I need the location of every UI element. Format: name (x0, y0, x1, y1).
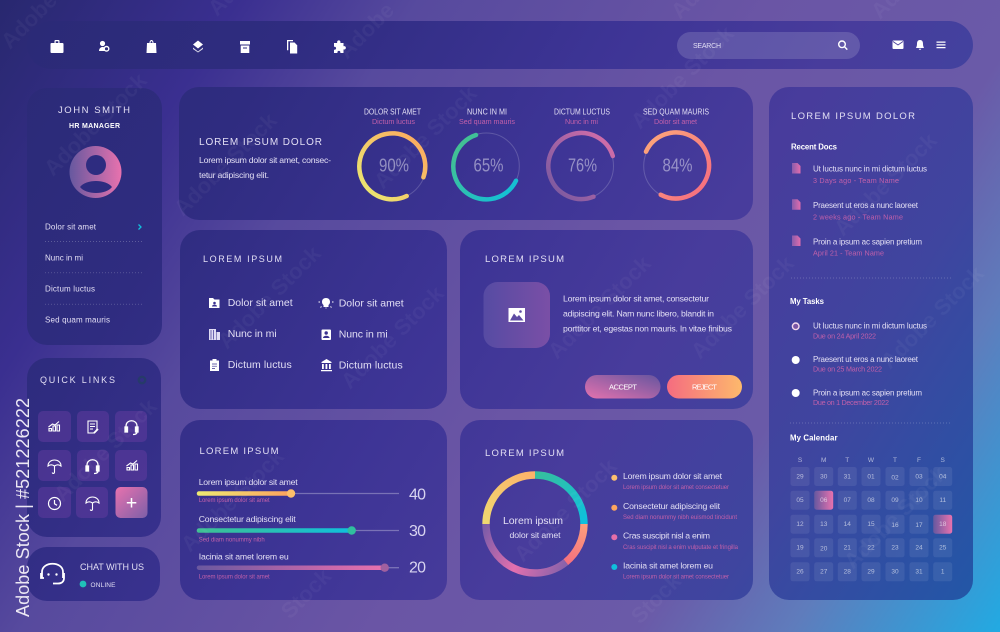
legend (611, 471, 739, 581)
date numbers: 10 (915, 497, 923, 504)
progress ring 84 percent: Dolor sit amet (654, 117, 697, 126)
icon: headset (125, 421, 138, 434)
slider 40 (199, 477, 426, 504)
icon: briefcase (50, 40, 64, 53)
icon: layers (193, 40, 203, 52)
list item: bank: Dictum luctus (339, 360, 403, 372)
profile role: HR MANAGER (69, 123, 120, 130)
progress ring 65 percent: NUNC IN MI (467, 108, 507, 116)
chat heading: CHAT WITH US (80, 562, 144, 572)
donut chart (486, 475, 584, 573)
icon list heading: LOREM IPSUM (203, 254, 282, 264)
task checkbox selected (792, 323, 799, 330)
menu list: Sed quam mauris (45, 316, 110, 325)
date numbers: 21 (844, 544, 851, 552)
reject button: REJECT (692, 382, 717, 392)
slider 40: Lorem ipsum dolor sit amet (199, 477, 298, 487)
panel: quick links (27, 358, 161, 537)
icon: menu (936, 42, 946, 48)
stock watermark pattern: Adobe Stock (829, 127, 942, 241)
legend: Lorem ipsum dolor sit amet consectetuer (623, 575, 729, 581)
search box: SEARCH (693, 43, 721, 50)
stock watermark pattern: Adobe Stock (213, 240, 326, 354)
donut heading: LOREM IPSUM (485, 448, 564, 459)
content paragraph: porttitor et, egestas non mauris. In vitae finibus (563, 324, 733, 334)
menu list: Dolor sit amet (45, 222, 97, 232)
stock watermark pattern: Adobe Stock (49, 393, 162, 507)
progress ring 90 percent: DOLOR SIT AMET (364, 108, 421, 116)
progress ring 90 percent: Dictum luctus (372, 117, 415, 126)
slider 30: Consectetur adipiscing elit (199, 514, 296, 524)
stock watermark pattern: Adobe Stock (336, 280, 449, 394)
list item: lightbulb: Dolor sit amet (339, 297, 404, 309)
date numbers: 23 (891, 544, 899, 552)
weekday labels: S (941, 457, 946, 464)
date numbers: 31 (844, 474, 851, 480)
panel: overview with progress rings (179, 87, 753, 220)
recent docs: April 21 - Team Name (813, 249, 884, 258)
date numbers: 25 (939, 544, 947, 552)
slider 20: Iacinia sit amet lorem eu (199, 552, 289, 562)
calendar: My Calendar (790, 433, 838, 442)
my tasks: Due on 25 March 2022 (813, 365, 882, 374)
stock watermark pattern: Stock (276, 563, 336, 624)
recent docs: Recent Docs (791, 142, 838, 152)
menu list: Dictum luctus (45, 285, 95, 294)
accept button: ACCEPT (609, 382, 637, 392)
date numbers: 31 (915, 568, 923, 576)
avatar (70, 146, 122, 198)
menu list (45, 222, 143, 325)
content paragraph: Lorem ipsum dolor sit amet, consectetur (563, 294, 709, 304)
highlighted date 18 (933, 515, 952, 534)
legend: Sed diam nonummy nibh euismod tincidunt (623, 515, 737, 521)
accept button (585, 375, 660, 398)
slider 40: 40 (409, 486, 426, 504)
stock watermark pattern: Adobe Stock (876, 260, 989, 374)
date numbers: 11 (939, 497, 946, 504)
date numbers: 02 (891, 474, 899, 482)
icon: document with pen (88, 421, 98, 433)
slider 30: 30 (409, 523, 426, 540)
stock watermark pattern: Adobe Stock (839, 460, 952, 574)
weekday labels (798, 457, 946, 464)
panel: donut chart (460, 420, 753, 600)
legend: Iacinia sit amet lorem eu (623, 560, 713, 570)
my tasks: Ut luctus nunc in mi dictum luctus (813, 322, 927, 331)
date numbers: 27 (820, 568, 828, 576)
icon: doc (792, 199, 800, 210)
panel: sliders (180, 420, 447, 600)
progress ring 76 percent: 76% (568, 156, 597, 176)
icon: chevron (138, 224, 141, 230)
my tasks: Proin a ipsum ac sapien pretium (813, 389, 922, 398)
overview description (199, 155, 331, 180)
weekday labels: S (798, 457, 803, 464)
my tasks (790, 297, 927, 407)
panel: chat (27, 547, 160, 601)
icon: magnifier (839, 41, 847, 50)
panel: content card with actions (460, 230, 753, 409)
legend: Consectetur adipiscing elit (623, 501, 721, 511)
date numbers: 01 (867, 474, 875, 480)
icon: archive box (240, 41, 250, 53)
overview heading: LOREM IPSUM DOLOR (199, 137, 322, 148)
date numbers: 15 (867, 521, 875, 528)
vertical stock credit: Adobe Stock | #521226222 (13, 398, 33, 617)
stock watermark pattern: Adobe Stock (686, 250, 799, 364)
task checkbox (792, 356, 800, 364)
icon: user settings (99, 41, 109, 51)
weekday labels: T (845, 457, 849, 464)
panel: icon list (180, 230, 447, 409)
icon: headset (86, 460, 99, 474)
date numbers: 22 (867, 544, 875, 552)
icon: documents (287, 40, 297, 54)
date numbers: 04 (939, 474, 947, 480)
date numbers: 07 (844, 497, 851, 504)
icon: clock (48, 498, 60, 510)
search box (677, 32, 860, 59)
slider 40: Lorem ipsum dolor sit amet (199, 498, 270, 504)
tile grid (38, 411, 147, 518)
panel: top navigation bar (27, 21, 973, 69)
overview description: tetur adipiscing elit. (199, 170, 269, 180)
date numbers: 16 (891, 522, 899, 529)
icon: mail (892, 40, 904, 49)
my tasks: Due on 24 April 2022 (813, 331, 876, 340)
stock watermark pattern: Adobe Stock (176, 443, 289, 557)
icon: chart (126, 460, 138, 470)
add button (116, 487, 148, 518)
task checkbox (792, 389, 800, 397)
my tasks: My Tasks (790, 297, 825, 306)
date numbers: 29 (796, 474, 804, 480)
content card heading: LOREM IPSUM (485, 254, 564, 265)
recent docs: 2 weeks ago - Team Name (813, 212, 903, 221)
donut centre label: Lorem ipsum (503, 515, 563, 527)
icon: doc (792, 163, 800, 174)
stock watermark pattern: Stock (626, 568, 686, 629)
online status: ONLINE (90, 582, 116, 589)
recent docs: Proin a ipsum ac sapien pretium (813, 237, 922, 246)
progress ring 65 percent: 65% (474, 156, 504, 176)
sliders heading: LOREM IPSUM (200, 446, 279, 457)
slider 30: Sed diam nonummy nibh (199, 538, 265, 544)
date numbers: 30 (820, 474, 828, 480)
sidebar heading: LOREM IPSUM DOLOR (791, 111, 915, 122)
list item: contact card: Nunc in mi (339, 328, 388, 340)
icon: doc (792, 236, 800, 246)
progress ring 65 percent: Sed quam mauris (459, 117, 515, 126)
progress ring 84 percent: SED QUAM MAURIS (643, 108, 709, 116)
icon: umbrella (48, 460, 61, 473)
icon: chart (48, 422, 60, 431)
date numbers: 13 (820, 521, 828, 528)
icon: gear (139, 377, 145, 383)
progress ring 76 percent: Nunc in mi (565, 117, 598, 126)
list item: folder: Dolor sit amet (228, 297, 293, 309)
slider 20: Lorem ipsum dolor sit amet (199, 575, 270, 581)
legend: Cras suscipit nisl a enim vulputate et fringilla (623, 545, 739, 551)
slider 20 (199, 552, 426, 581)
recent docs (791, 142, 927, 258)
overview description: Lorem ipsum dolor sit amet, consec- (199, 155, 331, 165)
date numbers: 09 (891, 497, 899, 504)
date numbers (796, 474, 947, 576)
recent docs: Praesent ut eros a nunc laoreet (813, 201, 919, 210)
date numbers: 1 (941, 568, 945, 576)
date numbers: 03 (915, 474, 923, 480)
date numbers: 30 (891, 568, 899, 576)
image placeholder (484, 282, 550, 348)
date numbers: 17 (915, 522, 923, 529)
stock watermark pattern: Adobe Stock (543, 250, 656, 364)
menu list: Nunc in mi (45, 254, 83, 262)
date cells (790, 467, 952, 581)
stock watermark pattern: Adobe Stock (369, 80, 482, 194)
stock watermark pattern: Adobe Stock (39, 67, 152, 181)
panel: profile (27, 88, 162, 345)
progress ring 84 percent: 84% (662, 156, 692, 176)
progress ring 76 percent: DICTUM LUCTUS (554, 108, 610, 116)
stock watermark pattern: Adobe Stock (626, 20, 739, 134)
progress ring 65 percent (453, 108, 519, 199)
weekday labels: M (821, 457, 826, 464)
icon: umbrella (86, 497, 99, 510)
donut centre label: dolor sit amet (510, 530, 561, 540)
date numbers: 24 (915, 544, 923, 552)
my tasks: Due on 1 December 2022 (813, 398, 889, 407)
my tasks: Praesent ut eros a nunc laoreet (813, 355, 919, 364)
date numbers: 19 (796, 544, 804, 552)
list item: building: Nunc in mi (228, 328, 277, 340)
recent docs: 3 Days ago - Team Name (813, 176, 899, 185)
stock watermark pattern: Adobe Stock (169, 107, 282, 221)
profile name: JOHN SMITH (58, 105, 130, 116)
progress ring 90 percent: 90% (379, 156, 409, 176)
date numbers: 06 (820, 497, 828, 504)
progress ring 84 percent (643, 108, 710, 199)
date numbers: 26 (796, 568, 804, 576)
weekday labels: T (893, 457, 897, 464)
reject button (667, 375, 742, 398)
date numbers: 18 (939, 521, 947, 528)
recent docs: Ut luctus nunc in mi dictum luctus (813, 165, 927, 174)
progress ring 76 percent (548, 108, 614, 199)
date numbers: 14 (844, 521, 851, 528)
date numbers: 28 (844, 568, 851, 576)
date numbers: 29 (867, 568, 875, 576)
icon: bell (916, 40, 924, 50)
date numbers: 20 (820, 546, 828, 552)
legend: Lorem ipsum dolor sit amet consectetuer (623, 485, 729, 491)
icon: chat support head (41, 564, 64, 584)
slider 30 (199, 514, 426, 544)
legend: Lorem ipsum dolor sit amet (623, 471, 723, 481)
highlighted date 06 (814, 491, 833, 510)
panel: sidebar (769, 87, 973, 600)
quick links heading: QUICK LINKS (40, 375, 115, 385)
slider 20: 20 (409, 560, 426, 576)
content paragraph: adipiscing elit. Nam nunc libero, blandit in (563, 309, 714, 319)
content paragraph (563, 294, 733, 334)
date numbers: 12 (796, 521, 804, 528)
stock watermark pattern: Adobe Stock (509, 453, 622, 567)
icon: puzzle piece (334, 40, 346, 53)
calendar (790, 433, 952, 581)
date numbers: 05 (796, 497, 804, 504)
weekday labels: W (868, 457, 875, 464)
donut centre label (503, 515, 563, 540)
date numbers: 08 (867, 497, 875, 504)
legend: Cras suscipit nisl a enim (623, 530, 710, 540)
weekday labels: F (917, 457, 921, 464)
list item: clipboard: Dictum luctus (228, 359, 292, 371)
progress ring 90 percent (359, 108, 426, 199)
icon: shopping bag (146, 40, 156, 53)
